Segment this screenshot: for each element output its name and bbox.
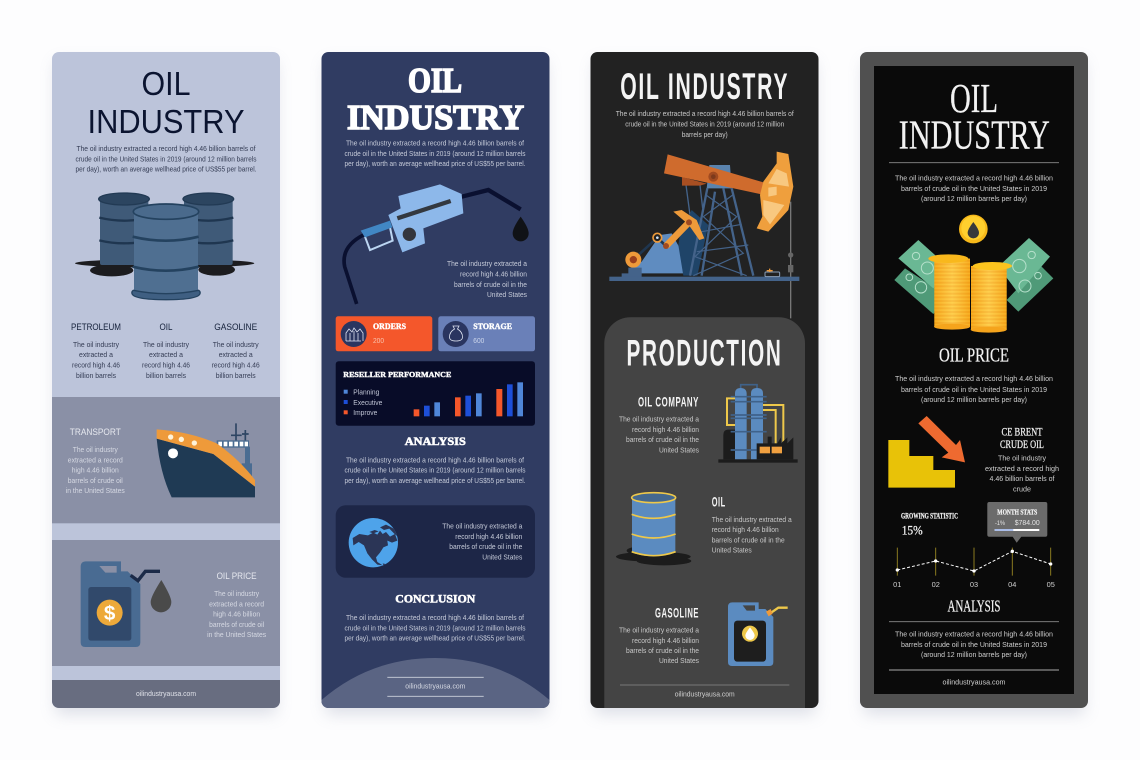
column: petroleum: record high 4.46 — [72, 360, 120, 370]
block: ce brent crude oil: CE BRENT — [1002, 424, 1043, 438]
block: oil: barrels of crude oil in the — [712, 536, 785, 544]
oil price text: The oil industry extracted a record high 4.46 billion — [895, 374, 1053, 383]
band: transport: TRANSPORT — [70, 427, 121, 438]
nozzle caption: The oil industry extracted a — [447, 259, 528, 268]
legend — [344, 388, 382, 417]
analysis text — [344, 456, 526, 485]
block: ce brent crude oil: crude — [1013, 484, 1031, 494]
line chart — [893, 548, 1055, 589]
line chart: 04 — [1008, 580, 1016, 589]
column: oil: OIL — [160, 322, 172, 333]
block: oil company: barrels of crude oil in the — [626, 435, 699, 444]
column: gasoline: billion barrels — [216, 371, 256, 380]
statistic: growing 15%: 15% — [902, 522, 923, 538]
intro text — [895, 174, 1053, 203]
oil price text: barrels of crude oil in the United States in 2019 — [901, 385, 1047, 394]
globe card: barrels of crude oil in the — [449, 542, 522, 551]
title: OIL — [408, 61, 462, 100]
icon: oil tanker ship — [157, 423, 255, 497]
block: gasoline: United States — [659, 656, 699, 665]
icon: fuel nozzle — [344, 184, 529, 304]
block: oil company: United States — [659, 446, 699, 454]
title — [347, 68, 524, 130]
column: oil: extracted a — [149, 350, 184, 359]
conclusion text: crude oil in the United States in 2019 (around 12 million barrels — [344, 624, 526, 632]
analysis text: per day), worth an average wellhead price of US$55 per barrel. — [344, 476, 526, 485]
band: oil price: extracted a record — [209, 599, 264, 608]
panel: production: PRODUCTION — [626, 333, 782, 374]
oil price text — [895, 374, 1053, 404]
nozzle caption: record high 4.46 billion — [460, 270, 527, 278]
footer text: oilindustryausa.com — [942, 678, 1006, 686]
analysis text: barrels of crude oil in the United States in 2019 — [901, 640, 1047, 649]
column: petroleum: billion barrels — [76, 371, 116, 380]
icon: jerrycan with dollar — [81, 561, 171, 647]
globe card — [336, 505, 535, 578]
card: storage: 600 — [473, 336, 484, 345]
footer: oilindustryausa.com — [675, 690, 735, 698]
column: petroleum — [71, 322, 121, 380]
panel: navy infographic — [322, 52, 550, 708]
footer: oilindustryausa.com — [136, 689, 196, 698]
band: oil price: OIL PRICE — [217, 571, 257, 582]
title: INDUSTRY — [347, 98, 524, 137]
intro text: per day), worth an average wellhead price of US$55 per barrel. — [76, 164, 256, 174]
intro text: crude oil in the United States in 2019 (around 12 million barrels — [344, 149, 526, 158]
intro text — [616, 109, 795, 139]
title: INDUSTRY — [88, 103, 244, 140]
analysis text: crude oil in the United States in 2019 (around 12 million barrels — [344, 466, 526, 475]
intro text: crude oil in the United States in 2019 (around 12 million — [625, 120, 784, 128]
band: oil price — [52, 540, 280, 666]
conclusion text — [344, 613, 526, 642]
card: orders: ORDERS — [373, 322, 407, 331]
icon: globe — [349, 518, 399, 567]
legend: Planning — [353, 388, 379, 396]
band: oil price: in the United States — [207, 630, 266, 639]
block: gasoline: The oil industry extracted a — [619, 626, 700, 634]
panel: production — [604, 317, 805, 737]
icon: barrel — [616, 493, 691, 565]
chart panel: reseller performance — [336, 361, 535, 426]
conclusion text: The oil industry extracted a record high 4.46 billion barrels of — [346, 613, 525, 622]
card: storage — [438, 316, 535, 351]
block: oil company: OIL COMPANY — [638, 394, 699, 410]
card: orders — [336, 316, 432, 351]
intro text: barrels of crude oil in the United States in 2019 — [901, 184, 1047, 193]
block: gasoline: record high 4.46 billion — [632, 636, 699, 645]
bar chart — [414, 382, 523, 416]
tooltip: month stats: MONTH STATS — [997, 508, 1037, 516]
legend: Executive — [353, 398, 382, 407]
panel: charcoal infographic — [590, 52, 818, 737]
chart panel: reseller performance: RESELLER PERFORMANCE — [343, 370, 451, 379]
band: transport — [52, 397, 280, 523]
statistic: growing 15%: GROWING STATISTIC — [901, 512, 958, 520]
band: transport: barrels of crude oil — [68, 476, 123, 485]
line chart: 02 — [932, 580, 940, 589]
intro text: crude oil in the United States in 2019 (around 12 million barrels — [76, 154, 257, 163]
nozzle caption — [447, 259, 528, 299]
column: gasoline: record high 4.46 — [212, 360, 260, 370]
title — [899, 75, 1050, 157]
icon: jerrycan with flame — [728, 602, 788, 666]
band: transport: high 4.46 billion — [72, 466, 119, 475]
footer — [52, 680, 280, 708]
globe card: record high 4.46 billion — [455, 532, 522, 541]
column: petroleum: The oil industry — [73, 340, 119, 349]
block: oil company: record high 4.46 billion — [632, 425, 699, 434]
intro text: The oil industry extracted a record high 4.46 billion barrels of — [616, 109, 795, 118]
block: gasoline: barrels of crude oil in the — [626, 646, 699, 655]
tooltip: month stats: -1% — [995, 520, 1005, 527]
icon: refinery — [718, 385, 798, 463]
title: OIL — [142, 65, 190, 102]
tooltip: month stats — [987, 502, 1047, 543]
conclusion text: per day), worth an average wellhead price of US$55 per barrel. — [344, 634, 526, 642]
icon: oil barrels with spill — [75, 193, 254, 300]
column: oil: record high 4.46 — [142, 360, 190, 370]
icon: oil coin, banknotes and gold stacks — [894, 215, 1053, 333]
statistic: growing 15% — [901, 512, 958, 538]
column: oil: billion barrels — [146, 371, 186, 380]
column: gasoline: extracted a — [219, 350, 254, 359]
block: gasoline — [619, 602, 788, 666]
footer arc — [322, 658, 550, 708]
panel: light lavender infographic — [52, 52, 280, 708]
intro text — [76, 144, 257, 174]
heading: conclusion: CONCLUSION — [395, 592, 476, 606]
title: OIL INDUSTRY — [620, 66, 789, 107]
title: OIL — [950, 75, 998, 121]
title: INDUSTRY — [899, 111, 1050, 157]
globe card: The oil industry extracted a — [442, 522, 523, 530]
block: oil: United States — [712, 546, 752, 554]
icon: pumpjack — [609, 152, 799, 318]
block: oil: record high 4.46 billion — [712, 525, 779, 534]
heading: analysis: ANALYSIS — [948, 597, 1000, 616]
heading: oil price: OIL PRICE — [939, 345, 1009, 367]
block: ce brent crude oil: 4.46 billion barrels of — [990, 474, 1055, 483]
band: transport: The oil industry — [73, 445, 118, 454]
block: gasoline: GASOLINE — [655, 604, 699, 620]
analysis text: (around 12 million barrels per day) — [921, 650, 1027, 659]
card: orders: 200 — [373, 336, 384, 345]
line chart: 01 — [893, 580, 901, 589]
column: gasoline — [212, 322, 260, 380]
intro text: per day), worth an average wellhead price of US$55 per barrel. — [344, 159, 526, 168]
intro text: barrels per day) — [682, 130, 728, 139]
block: oil — [616, 493, 792, 565]
column: oil: The oil industry — [143, 340, 189, 349]
card: storage: STORAGE — [473, 322, 512, 331]
column: gasoline: The oil industry — [213, 340, 259, 349]
footer arc: oilindustryausa.com — [405, 682, 465, 690]
analysis text — [895, 630, 1053, 659]
block: ce brent crude oil — [985, 424, 1059, 494]
band: transport: in the United States — [66, 486, 125, 495]
globe card: United States — [482, 552, 523, 562]
line chart: 05 — [1047, 580, 1055, 589]
analysis text: The oil industry extracted a record high 4.46 billion — [895, 630, 1053, 638]
intro text — [344, 138, 526, 168]
band: transport: extracted a record — [68, 455, 123, 464]
band: oil price: high 4.46 billion — [213, 610, 260, 619]
heading: analysis: ANALYSIS — [405, 434, 466, 448]
block: oil company — [619, 385, 798, 463]
nozzle caption: barrels of crude oil in the — [454, 280, 527, 289]
icon: stairs with down arrow — [888, 416, 965, 488]
nozzle caption: United States — [487, 290, 527, 299]
intro text: The oil industry extracted a record high 4.46 billion barrels of — [346, 138, 525, 148]
column: oil — [142, 322, 190, 380]
block: ce brent crude oil: The oil industry — [998, 454, 1046, 462]
intro text: The oil industry extracted a record high 4.46 billion barrels of — [76, 144, 256, 153]
band: oil price: The oil industry — [214, 589, 259, 598]
column: petroleum: extracted a — [79, 350, 114, 359]
column: petroleum: PETROLEUM — [71, 322, 121, 333]
block: ce brent crude oil: extracted a record high — [985, 464, 1059, 473]
tooltip: month stats: $784.00 — [1015, 520, 1040, 527]
block: oil: OIL — [712, 494, 726, 510]
band: oil price: barrels of crude oil — [209, 620, 264, 629]
panel: black infographic — [860, 52, 1088, 708]
block: oil: The oil industry extracted a — [712, 515, 792, 524]
intro text: (around 12 million barrels per day) — [921, 194, 1027, 203]
column: gasoline: GASOLINE — [214, 322, 257, 333]
block: ce brent crude oil: CRUDE OIL — [1000, 437, 1044, 451]
icon: jerrycan with dollar: $ — [104, 602, 116, 625]
block: oil company: The oil industry extracted a — [619, 414, 700, 424]
intro text: The oil industry extracted a record high 4.46 billion — [895, 174, 1053, 182]
line chart: 03 — [970, 580, 978, 589]
analysis text: The oil industry extracted a record high 4.46 billion barrels of — [346, 456, 525, 464]
oil price text: (around 12 million barrels per day) — [921, 395, 1027, 404]
title — [90, 72, 244, 134]
legend: Improve — [353, 408, 377, 417]
